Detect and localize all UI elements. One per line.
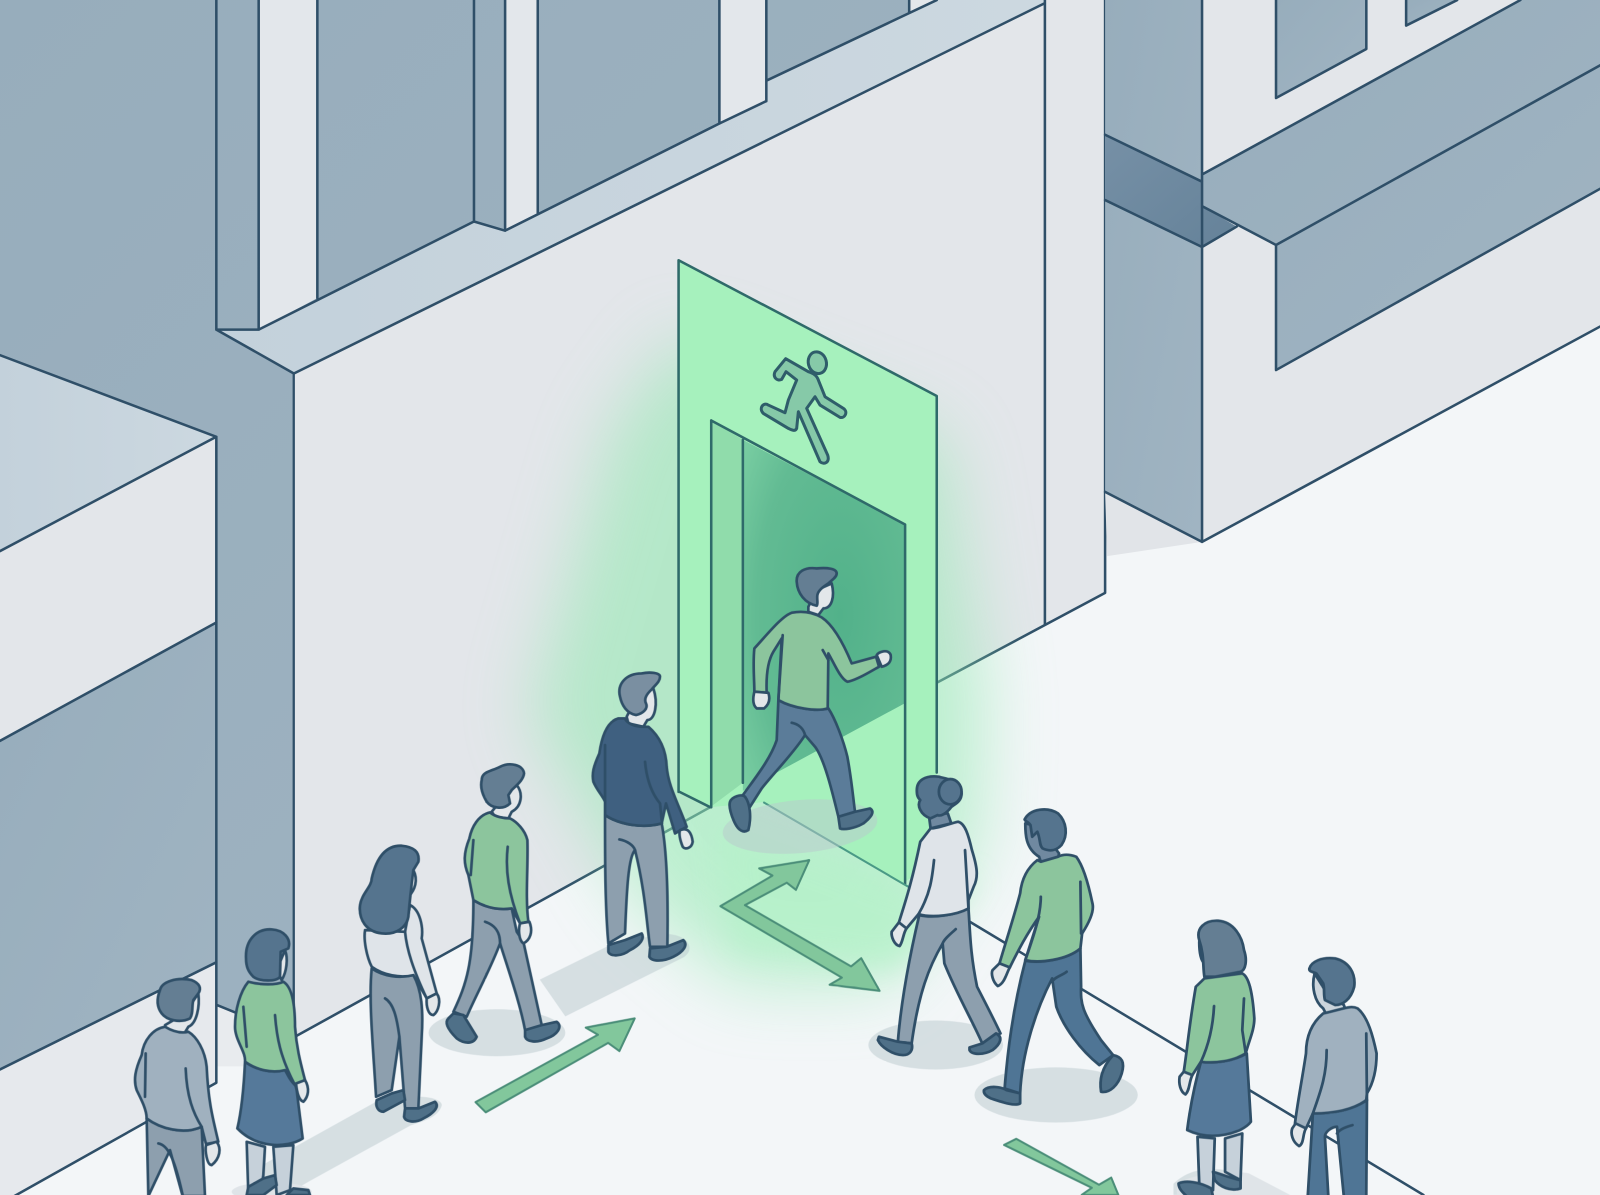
hair: [797, 568, 837, 606]
building: upper left facade with windows: [0, 0, 1045, 1037]
building: lower left block: [0, 355, 295, 1195]
floor shadows: [245, 793, 1286, 1195]
person: woman with bun walking out: [878, 776, 1001, 1055]
person: woman in green top and skirt, right: [1177, 921, 1290, 1195]
person: man in gray sweater, far right: [1292, 958, 1377, 1195]
glow on floor near threshold: [714, 816, 980, 969]
arrow: floor arrow to door: [476, 1018, 635, 1112]
door jamb: [710, 420, 743, 807]
floor line right of door: [969, 921, 1423, 1195]
face: [808, 583, 833, 615]
glowing green panel: [679, 260, 937, 884]
person: man in green sweater in queue: [447, 764, 559, 1043]
exit doorway: [679, 260, 969, 921]
hands: [753, 692, 769, 708]
building: right column and projecting wall: [1105, 0, 1600, 556]
green glow around exit: [531, 337, 985, 985]
person: man in navy sweater: [593, 673, 693, 961]
door interior: [743, 440, 905, 791]
arrow: in and out L-shaped route: [720, 860, 880, 991]
person: man in gray sweater, far left: [135, 979, 219, 1195]
arrow: exit route bottom: [1004, 1139, 1118, 1195]
building: central wall: [294, 0, 1105, 1037]
shoes: [730, 795, 750, 831]
shirt: [754, 612, 879, 710]
person: woman in green top and skirt, left: [232, 929, 312, 1195]
trousers: [742, 700, 855, 817]
person: woman with long hair: [360, 846, 439, 1121]
icon: running person exit sign: [761, 350, 846, 463]
person: man in green sweater walking out: [984, 809, 1123, 1105]
person: runner entering door: [730, 568, 891, 831]
